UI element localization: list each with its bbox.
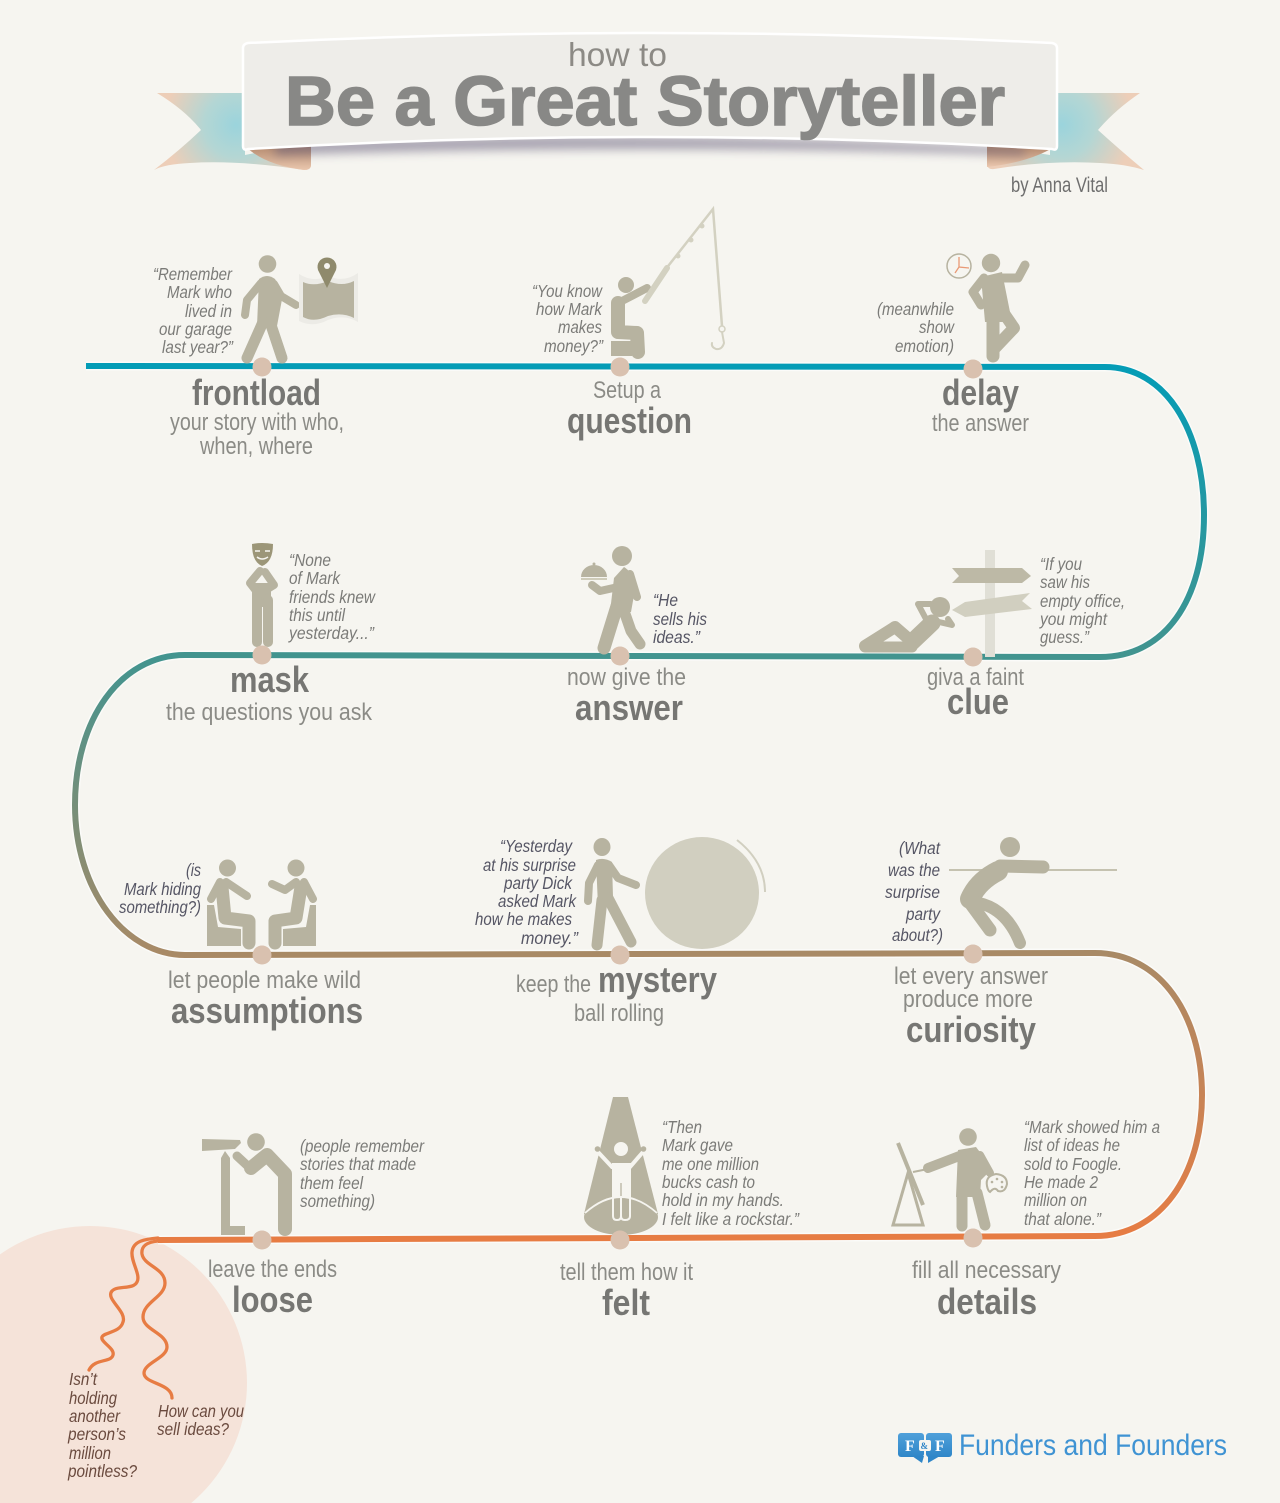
ribbon tail right <box>987 93 1144 170</box>
title banner <box>154 33 1144 170</box>
quote: list of ideas he <box>1024 1135 1120 1155</box>
marker dot <box>964 944 982 964</box>
quote: saw his <box>1040 572 1090 592</box>
quote: “Mark showed him a <box>1024 1117 1160 1137</box>
quote: at his surprise <box>483 855 576 875</box>
quote: something) <box>300 1191 375 1211</box>
quote <box>288 550 376 643</box>
label: assumptions <box>171 990 363 1031</box>
quote: last year?” <box>162 337 234 357</box>
label: question <box>567 400 692 441</box>
label: curiosity <box>906 1009 1036 1050</box>
label: mask <box>230 659 310 700</box>
ribbon fold right <box>987 142 1054 167</box>
label: let every answer <box>894 963 1048 990</box>
heading: Be a Great Storyteller: Be a Great Storyteller <box>285 62 1005 140</box>
quote: “Then <box>662 1117 702 1137</box>
quote: million on <box>1024 1190 1087 1210</box>
quote: sold to Foogle. <box>1024 1154 1122 1174</box>
quote: I felt like a rockstar.” <box>662 1209 800 1229</box>
open question: holding a million: another <box>69 1406 121 1426</box>
label: loose <box>232 1279 313 1320</box>
label: ball rolling <box>574 1000 664 1027</box>
quote <box>1024 1117 1160 1229</box>
label: keep the <box>516 971 591 998</box>
icon: person walking with map and pin <box>245 255 358 358</box>
label <box>168 967 363 1031</box>
marker dot <box>964 648 982 666</box>
winding story path <box>75 366 1204 1240</box>
open question: holding a million: pointless? <box>67 1461 137 1481</box>
quote <box>1039 554 1125 647</box>
label: Setup a <box>593 377 662 404</box>
label: delay <box>942 372 1019 413</box>
step 10: loose <box>202 1133 425 1320</box>
label: mystery <box>598 959 717 1000</box>
panel: peach circle with open questions <box>0 1226 247 1503</box>
quote: guess.” <box>1040 627 1090 647</box>
step 3: delay <box>877 254 1029 437</box>
marker dot <box>610 1230 630 1250</box>
quote: Mark who <box>167 282 232 302</box>
quote: “None <box>289 550 331 570</box>
quote <box>532 281 604 356</box>
quote: yesterday...” <box>288 623 375 643</box>
quote: asked Mark <box>498 891 577 911</box>
label: your story with who, <box>170 409 344 436</box>
quote: something?) <box>119 897 201 917</box>
open question: selling ideas: How can you <box>158 1401 244 1421</box>
quote: you might <box>1039 609 1108 629</box>
quote <box>877 299 955 356</box>
label: giva a faint <box>927 664 1024 691</box>
quote: (What <box>899 838 941 858</box>
marker dot <box>964 360 982 378</box>
quote: money.” <box>521 928 579 948</box>
open question: holding a million: person’s <box>67 1424 126 1444</box>
quote: “He <box>653 590 678 610</box>
quote: stories that made <box>300 1154 416 1174</box>
label: fill all necessary <box>912 1257 1061 1284</box>
open question: holding a million: Isn’t <box>69 1369 98 1389</box>
label <box>516 959 717 1027</box>
label <box>170 372 344 460</box>
logo wordmark: Funders and Founders <box>959 1429 1227 1462</box>
marker dot <box>252 946 272 964</box>
label <box>567 664 686 728</box>
quote <box>300 1136 425 1211</box>
marker dot <box>252 358 272 376</box>
quote: lived in <box>185 301 232 321</box>
marker dot <box>610 646 630 666</box>
quote: show <box>919 317 955 337</box>
quote <box>653 590 707 647</box>
label: clue <box>947 681 1009 722</box>
step 4: mask <box>166 543 376 726</box>
quote: this until <box>289 605 346 625</box>
label: let people make wild <box>168 967 361 994</box>
step 5: answer <box>567 546 707 728</box>
quote: how he makes <box>475 909 572 929</box>
quote: was the <box>888 860 940 880</box>
banner face <box>243 33 1057 150</box>
quote: about?) <box>892 925 943 945</box>
label: the questions you ask <box>166 699 373 726</box>
icon: person pushing a ball <box>588 837 765 949</box>
quote: hold in my hands. <box>662 1190 784 1210</box>
label <box>208 1256 337 1320</box>
quote <box>662 1117 800 1229</box>
label <box>894 963 1048 1050</box>
label: answer <box>575 687 683 728</box>
open question: selling ideas <box>157 1401 244 1439</box>
logo icon: speech bubbles: F <box>935 1438 945 1455</box>
quote: bucks cash to <box>662 1172 755 1192</box>
quote <box>885 838 943 945</box>
quote: He made 2 <box>1024 1172 1098 1192</box>
quote: friends knew <box>289 587 376 607</box>
open question: holding a million: million <box>69 1443 111 1463</box>
step 2: question <box>532 209 725 441</box>
quote: of Mark <box>289 568 341 588</box>
step 12: details <box>893 1117 1160 1322</box>
icon: painter at an easel <box>893 1128 1007 1226</box>
banner shadow <box>275 136 1025 155</box>
open question: holding a million: holding <box>69 1388 117 1408</box>
quote: our garage <box>159 319 232 339</box>
icon: leaning person with clock <box>947 254 1025 356</box>
quote: party <box>905 904 941 924</box>
marker dot <box>964 1228 982 1248</box>
quote: sells his <box>653 609 707 629</box>
label: frontload <box>192 372 321 413</box>
icon: person holding a mask <box>250 543 274 642</box>
open question: selling ideas: sell ideas? <box>157 1419 229 1439</box>
step 7: assumptions <box>119 860 363 1031</box>
quote <box>119 860 201 917</box>
quote: party Dick <box>503 873 573 893</box>
quote: how Mark <box>536 299 603 319</box>
quote: ideas.” <box>653 627 701 647</box>
marker dot <box>252 646 272 664</box>
icon: person at a telescope <box>202 1133 285 1235</box>
icon: two seated people talking <box>207 860 316 946</box>
author credit: by Anna Vital <box>1011 174 1108 197</box>
quote <box>153 264 234 357</box>
step 1: frontload <box>153 255 358 460</box>
icon: seated person fishing <box>611 209 725 356</box>
quote: “You know <box>532 281 603 301</box>
step 6: clue <box>865 550 1125 722</box>
ribbon tail left <box>154 93 311 170</box>
quote: empty office, <box>1040 591 1125 611</box>
quote: money?” <box>544 336 604 356</box>
open question: holding a million <box>67 1369 137 1481</box>
logo icon: speech bubbles <box>898 1433 952 1463</box>
icon: person in a spotlight <box>584 1097 658 1235</box>
quote: emotion) <box>895 336 954 356</box>
label: tell them how it <box>560 1259 693 1286</box>
heading: how to: how to <box>568 36 667 73</box>
label <box>567 377 692 441</box>
label <box>927 664 1024 722</box>
quote: me one million <box>662 1154 759 1174</box>
label: felt <box>602 1282 650 1323</box>
label: details <box>937 1281 1037 1322</box>
label <box>560 1259 693 1323</box>
logo: Funders and Founders <box>898 1429 1227 1463</box>
step 9: curiosity <box>885 837 1117 1050</box>
marker dot <box>610 946 630 964</box>
quote: “If you <box>1040 554 1082 574</box>
label: produce more <box>903 986 1033 1013</box>
icon: person pulling a rope <box>949 837 1117 943</box>
step 11: felt <box>560 1097 800 1323</box>
label <box>166 659 373 726</box>
icon: reclining person and signpost <box>865 550 1032 657</box>
quote: them feel <box>300 1173 364 1193</box>
label: the answer <box>932 410 1029 437</box>
quote <box>475 836 579 948</box>
logo icon: speech bubbles: F <box>905 1438 915 1455</box>
quote: surprise <box>885 882 940 902</box>
ribbon fold left <box>246 140 311 170</box>
quote: that alone.” <box>1024 1209 1102 1229</box>
step 8: mystery <box>475 836 765 1027</box>
quote: makes <box>558 317 602 337</box>
quote: (people remember <box>300 1136 425 1156</box>
squiggle branches <box>89 1238 172 1398</box>
marker dot <box>252 1230 272 1250</box>
label <box>932 372 1029 437</box>
label: now give the <box>567 664 686 691</box>
marker dot <box>610 358 630 376</box>
quote: “Remember <box>153 264 233 284</box>
label: when, where <box>199 433 313 460</box>
label: leave the ends <box>208 1256 337 1283</box>
logo icon: speech bubbles: & <box>920 1441 928 1451</box>
quote: (is <box>186 860 201 880</box>
quote: Mark gave <box>662 1135 733 1155</box>
quote: “Yesterday <box>500 836 573 856</box>
label <box>912 1257 1061 1322</box>
quote: Mark hiding <box>124 879 201 899</box>
quote: (meanwhile <box>877 299 954 319</box>
icon: waiter with cloche <box>581 546 640 648</box>
